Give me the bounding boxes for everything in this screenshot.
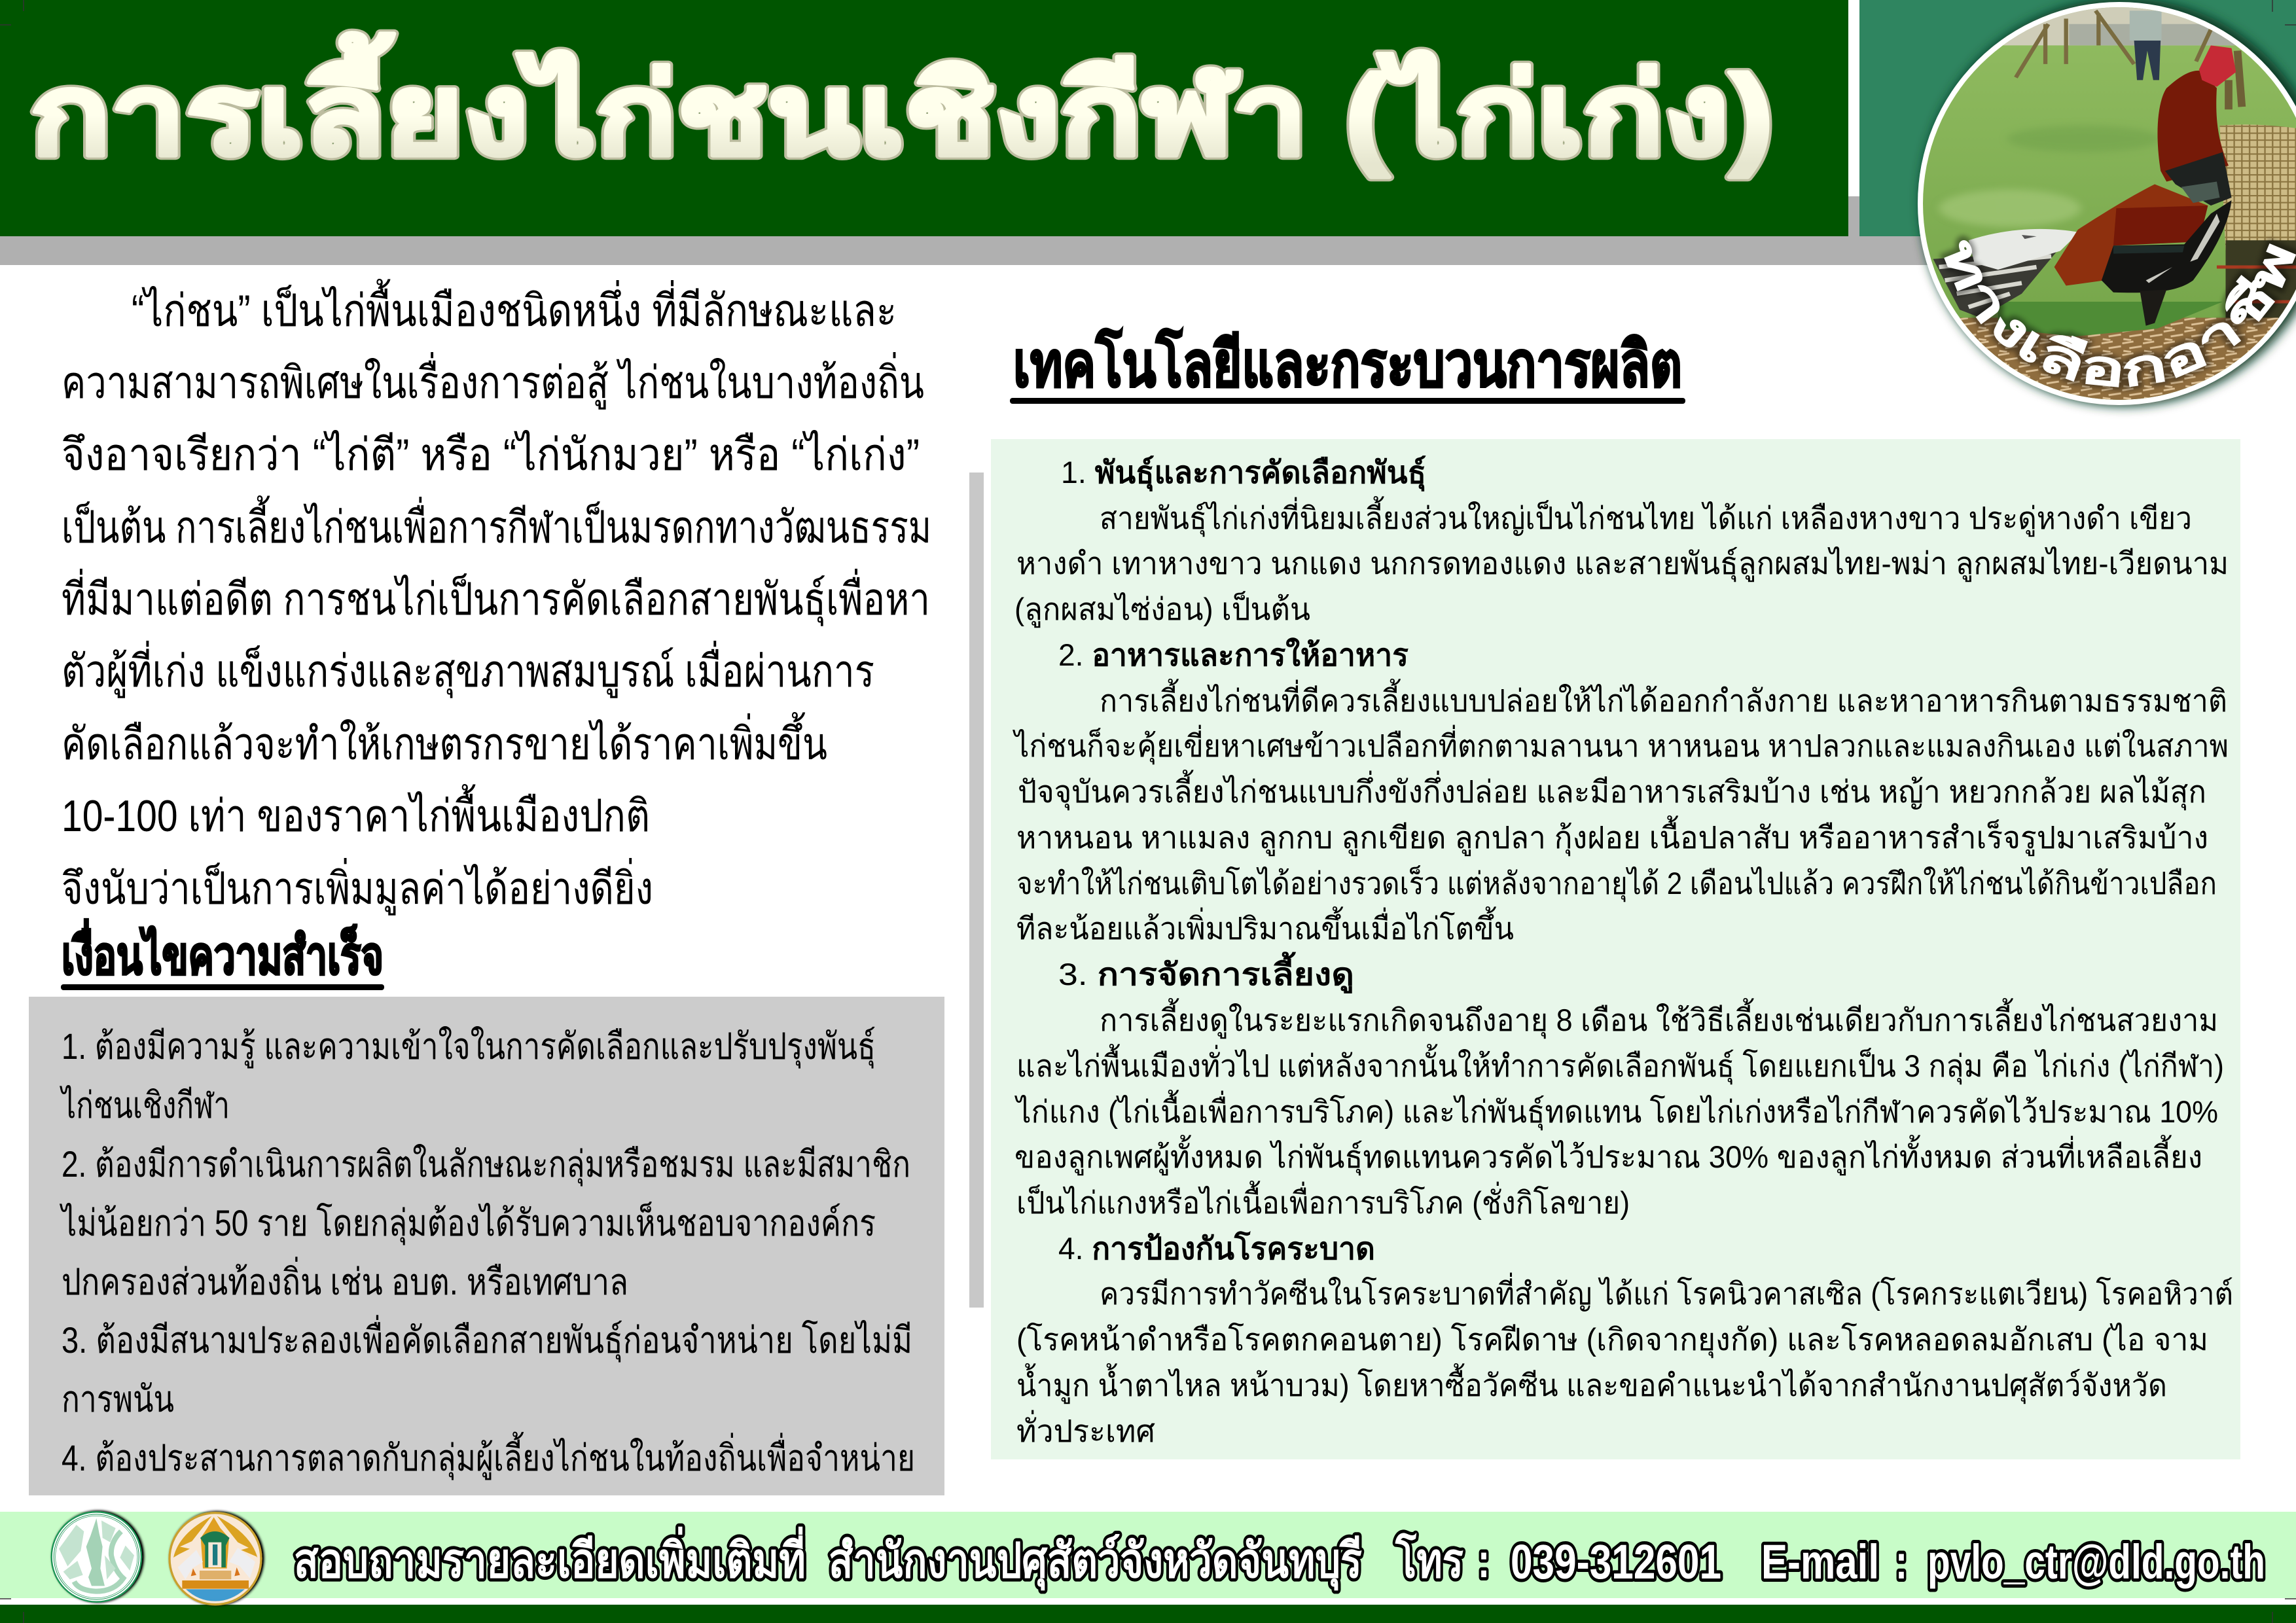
footer contact text: 039-312601 [1511, 1535, 1721, 1589]
photo caption on arc: ทางเลือกอาชีพ [1937, 233, 2296, 393]
intro paragraph: ตัวผู้ที่เก่ง แข็งแกร่งและสุขภาพสมบูรณ์ เมื่อผ่านการ [62, 641, 874, 698]
heading: technology and production process: เทคโนโลยีและกระบวนการผลิต [1013, 329, 1682, 400]
title: การเลี้ยงไก่ชนเชิงกีฬา (ไก่เก่ง) [30, 33, 1774, 178]
footer contact text: E-mail [1761, 1535, 1879, 1589]
footer contact text: สอบถามรายละเอียดเพิ่มเติมที่ [294, 1526, 806, 1588]
panel: technology and production: หาหนอน หาแมลง ลูกกบ ลูกเขียด ลูกปลา กุ้งฝอย เนื้อปลาสับ หรืออาหารสำเร็จรูปมาเสริมบ้าง [1016, 815, 2208, 857]
photo: fighting rooster in circle [1912, 0, 2296, 415]
icon: provincial seal [170, 1513, 261, 1605]
footer band [0, 1512, 2296, 1623]
panel: technology and production: (โรคหน้าดำหรือโรคตกคอนตาย) โรคฝีดาษ (เกิดจากยุงกัด) และโรคหลอดลมอักเสบ (ไอ จาม [1016, 1322, 2208, 1359]
intro paragraph: ที่มีมาแต่อดีต การชนไก่เป็นการคัดเลือกสายพันธุ์เพื่อหา [62, 569, 930, 626]
panel: technology and production: ไก่ชนก็จะคุ้ยเขี่ยหาเศษข้าวเปลือกที่ตกตามลานนา หาหนอน หาปลวกและแมลงกินเอง แต่ในสภาพ [1012, 724, 2229, 765]
panel: technology and production: 3. การจัดการเลี้ยงดู [1058, 952, 1354, 994]
heading: success conditions: เงื่อนไขความสำเร็จ [62, 919, 384, 985]
panel: technology and production: 4. การป้องกันโรคระบาด [1058, 1230, 1375, 1266]
intro paragraph: จึงนับว่าเป็นการเพิ่มมูลค่าได้อย่างดียิ่ง [62, 858, 653, 916]
panel: success conditions: 3. ต้องมีสนามประลองเพื่อคัดเลือกสายพันธุ์ก่อนจำหน่าย โดยไม่มี [62, 1315, 912, 1363]
heading: success conditions [61, 919, 384, 990]
footer contact text: : [1895, 1535, 1907, 1589]
intro paragraph: 10-100 เท่า ของราคาไก่พื้นเมืองปกติ [62, 784, 650, 841]
panel: technology and production: ของลูกเพศผู้ทั้งหมด ไก่พันธุ์ทดแทนควรคัดไว้ประมาณ 30% ของลูกไก่ทั้งหมด ส่วนที่เหลือเลี้ยง [1014, 1135, 2202, 1176]
intro paragraph: เป็นต้น การเลี้ยงไก่ชนเพื่อการกีฬาเป็นมรดกทางวัฒนธรรม [62, 495, 931, 552]
panel: success conditions: 2. ต้องมีการดำเนินการผลิตในลักษณะกลุ่มหรือชมรม และมีสมาชิก [62, 1143, 910, 1186]
panel: technology and production: น้ำมูก น้ำตาไหล หน้าบวม) โดยหาซื้อวัคซีน และขอคำแนะนำได้จากสำนักงานปศุสัตว์จังหวัด [1016, 1363, 2167, 1404]
panel: success conditions: การพนัน [62, 1378, 174, 1419]
intro paragraph: จึงอาจเรียกว่า “ไก่ตี” หรือ “ไก่นักมวย” หรือ “ไก่เก่ง” [62, 429, 920, 480]
panel: technology and production: และไก่พื้นเมืองทั่วไป แต่หลังจากนั้นให้ทำการคัดเลือกพันธุ์ โดยแยกเป็น 3 กลุ่ม คือ ไก่เก่ง (ไก่กีฬา) [1016, 1044, 2224, 1085]
footer contact text: โทร [1395, 1532, 1463, 1588]
vertical divider bar [969, 473, 984, 1308]
header banner [0, 0, 2296, 265]
panel: technology and production: ไก่แกง (ไก่เนื้อเพื่อการบริโภค) และไก่พันธุ์ทดแทน โดยไก่เก่งหรือไก่กีฬาควรคัดไว้ประมาณ 10% [1014, 1090, 2218, 1131]
photo caption on arc: ทางเลือกอาชีพ [1944, 240, 2296, 387]
title: การเลี้ยงไก่ชนเชิงกีฬา (ไก่เก่ง) [30, 33, 1774, 178]
panel: technology and production: (ลูกผสมไซ่ง่อน) เป็นต้น [1014, 590, 1310, 628]
panel: success conditions [29, 997, 944, 1495]
intro paragraph: ความสามารถพิเศษในเรื่องการต่อสู้ ไก่ชนในบางท้องถิ่น [62, 352, 924, 410]
panel: technology and production: การเลี้ยงไก่ชนที่ดีควรเลี้ยงแบบปล่อยให้ไก่ได้ออกกำลังกาย และหาอาหารกินตามธรรมชาติ [1100, 679, 2227, 718]
intro paragraph: “ไก่ชน” เป็นไก่พื้นเมืองชนิดหนึ่ง ที่มีลักษณะและ [132, 279, 897, 336]
panel: success conditions: ไม่น้อยกว่า 50 ราย โดยกลุ่มต้องได้รับความเห็นชอบจากองค์กร [60, 1201, 876, 1245]
panel: technology and production: 1. พันธุ์และการคัดเลือกพันธุ์ [1061, 455, 1426, 491]
panel: technology and production: ควรมีการทำวัคซีนในโรคระบาดที่สำคัญ ได้แก่ โรคนิวคาสเซิล (โรคกระแตเวียน) โรคอหิวาต์ [1100, 1272, 2233, 1311]
footer contact text: สำนักงานปศุสัตว์จังหวัดจันทบุรี [829, 1533, 1362, 1591]
panel: technology and production: สายพันธุ์ไก่เก่งที่นิยมเลี้ยงส่วนใหญ่เป็นไก่ชนไทย ได้แก่ เหลืองหางขาว ประดู่หางดำ เขียว [1100, 496, 2192, 537]
panel: technology and production: ปัจจุบันควรเลี้ยงไก่ชนแบบกึ่งขังกึ่งปล่อย และมีอาหารเสริมบ้าง เช่น หญ้า หยวกกล้วย ผลไม้สุก [1018, 770, 2206, 811]
panel: success conditions: ไก่ชนเชิงกีฬา [60, 1084, 230, 1126]
panel: technology and production: 2. อาหารและการให้อาหาร [1058, 637, 1408, 672]
panel: technology and production: การเลี้ยงดูในระยะแรกเกิดจนถึงอายุ 8 เดือน ใช้วิธีเลี้ยงเช่นเดียวกับการเลี้ยงไก่ชนสวยงาม [1100, 998, 2218, 1039]
panel: technology and production [991, 439, 2240, 1459]
intro paragraph [62, 279, 931, 916]
panel: success conditions: 4. ต้องประสานการตลาดกับกลุ่มผู้เลี้ยงไก่ชนในท้องถิ่นเพื่อจำหน่าย [62, 1432, 915, 1480]
panel: technology and production: เป็นไก่แกงหรือไก่เนื้อเพื่อการบริโภค (ชั่งกิโลขาย) [1016, 1181, 1630, 1220]
panel: technology and production: หางดำ เทาหางขาว นกแดง นกกรดทองแดง และสายพันธุ์ลูกผสมไทย-พม่า ลูกผสมไทย-เวียดนาม [1016, 546, 2229, 582]
footer contact text [294, 1526, 2265, 1591]
icon: department of livestock seal [52, 1512, 141, 1602]
panel: success conditions: 1. ต้องมีความรู้ และความเข้าใจในการคัดเลือกและปรับปรุงพันธุ์ [62, 1026, 876, 1069]
intro paragraph: คัดเลือกแล้วจะทำให้เกษตรกรขายได้ราคาเพิ่มขึ้น [62, 712, 827, 769]
panel: technology and production: ทีละน้อยแล้วเพิ่มปริมาณขึ้นเมื่อไก่โตขึ้น [1016, 906, 1514, 946]
panel: success conditions: ปกครองส่วนท้องถิ่น เช่น อบต. หรือเทศบาล [62, 1257, 628, 1302]
footer contact text: : [1478, 1533, 1490, 1588]
panel: technology and production: ทั่วประเทศ [1016, 1410, 1155, 1448]
